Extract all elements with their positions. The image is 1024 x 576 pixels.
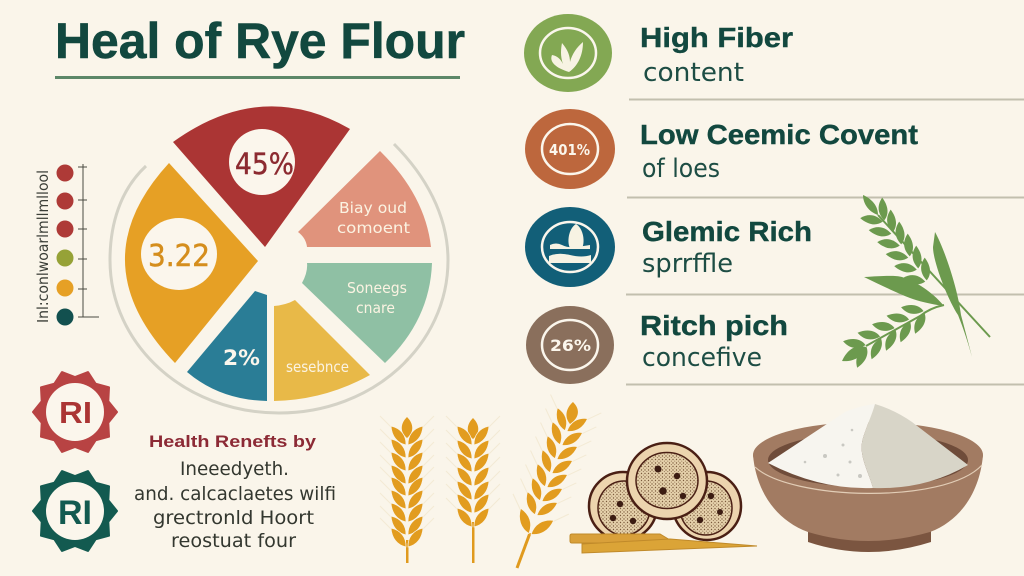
sticks xyxy=(570,534,757,553)
benefit row: glemic rich: Glemic Rich xyxy=(642,216,812,247)
illustration: rye crackers and sticks xyxy=(570,443,757,553)
benefit row: low ceemic covent: of loes xyxy=(642,154,720,184)
illustration: wheat stalk 1 xyxy=(380,416,434,563)
benefit row: ritch pich: concefive xyxy=(642,343,762,373)
cracker left xyxy=(589,472,657,540)
divider xyxy=(627,196,1024,198)
pie outer ring xyxy=(110,144,448,413)
segment: yellow xyxy=(274,300,370,401)
divider xyxy=(626,384,1024,386)
legend axis xyxy=(78,164,99,317)
benefit row: high fiber xyxy=(524,14,793,92)
health benefits text block: grectronld Hoort xyxy=(153,507,314,529)
benefit row: ritch pich: Ritch pich xyxy=(640,310,788,341)
segment: green xyxy=(302,263,432,363)
benefit row: low ceemic covent xyxy=(525,109,918,189)
icon: 401% badge: 401% xyxy=(549,141,590,159)
bowl interior xyxy=(768,433,968,487)
heading: Health Renefts by xyxy=(149,432,317,451)
segment: red 45%: 45% xyxy=(235,147,294,181)
bowl body xyxy=(753,455,983,541)
cracker top xyxy=(627,443,707,519)
icon: 26% badge: 26% xyxy=(550,336,591,355)
icon: 401% badge xyxy=(525,109,615,189)
illustration: bowl of flour xyxy=(753,404,983,552)
bowl rim xyxy=(753,422,983,488)
divider xyxy=(629,98,1024,100)
icon: grain badge xyxy=(525,207,615,287)
benefit row: glemic rich xyxy=(525,207,812,287)
flour shaded side xyxy=(862,404,968,488)
badge: green RI xyxy=(33,471,117,551)
segment: salmon xyxy=(298,151,431,247)
illustration: green rye sprig xyxy=(842,195,990,368)
flour speckles xyxy=(804,429,862,478)
segment: teal 2% xyxy=(187,291,267,401)
segment: salmon: comoent xyxy=(337,219,410,237)
benefit row: glemic rich: sprrffle xyxy=(642,249,733,279)
segment: green: cnare xyxy=(356,299,395,317)
illustration: wheat stalk 3 xyxy=(502,395,601,568)
segment: orange 3.22: 3.22 xyxy=(148,239,210,274)
badge: red RI xyxy=(33,372,117,452)
segment: teal 2%: 2% xyxy=(223,346,260,370)
benefit row: low ceemic covent: Low Ceemic Covent xyxy=(640,119,918,150)
bowl foot xyxy=(808,525,931,552)
badge: red RI: RI xyxy=(59,395,92,430)
divider xyxy=(626,294,1024,296)
health benefits text block: Ineeedyeth. xyxy=(180,458,289,480)
health benefits text block: and. calcaclaetes wilfi xyxy=(134,483,336,505)
segment: red 45% xyxy=(173,106,350,247)
flour light side xyxy=(768,404,875,488)
illustration: wheat stalk 2 xyxy=(446,416,500,563)
legend scale xyxy=(34,164,99,326)
segment: yellow: sesebnce xyxy=(286,358,349,376)
title underline xyxy=(55,76,460,79)
pie chart xyxy=(110,106,448,413)
segment: green: Soneegs xyxy=(347,279,407,297)
segment: salmon: Biay oud xyxy=(339,199,407,217)
legend rotated label: Inl:conlwoarlmllmllool xyxy=(34,170,52,323)
segment: orange 3.22 xyxy=(125,163,258,363)
benefit row: high fiber: content xyxy=(643,58,744,88)
health benefits text block xyxy=(134,432,336,552)
icon: 26% badge xyxy=(526,306,614,384)
badge: green RI: RI xyxy=(58,494,92,532)
cracker right xyxy=(673,472,741,540)
benefit row: ritch pich xyxy=(526,306,788,384)
title: Heal of Rye Flour xyxy=(55,13,465,69)
icon: leaf badge xyxy=(524,14,612,92)
health benefits text block: reostuat four xyxy=(171,530,296,552)
legend dots xyxy=(56,164,74,326)
benefit row: high fiber: High Fiber xyxy=(640,22,793,53)
